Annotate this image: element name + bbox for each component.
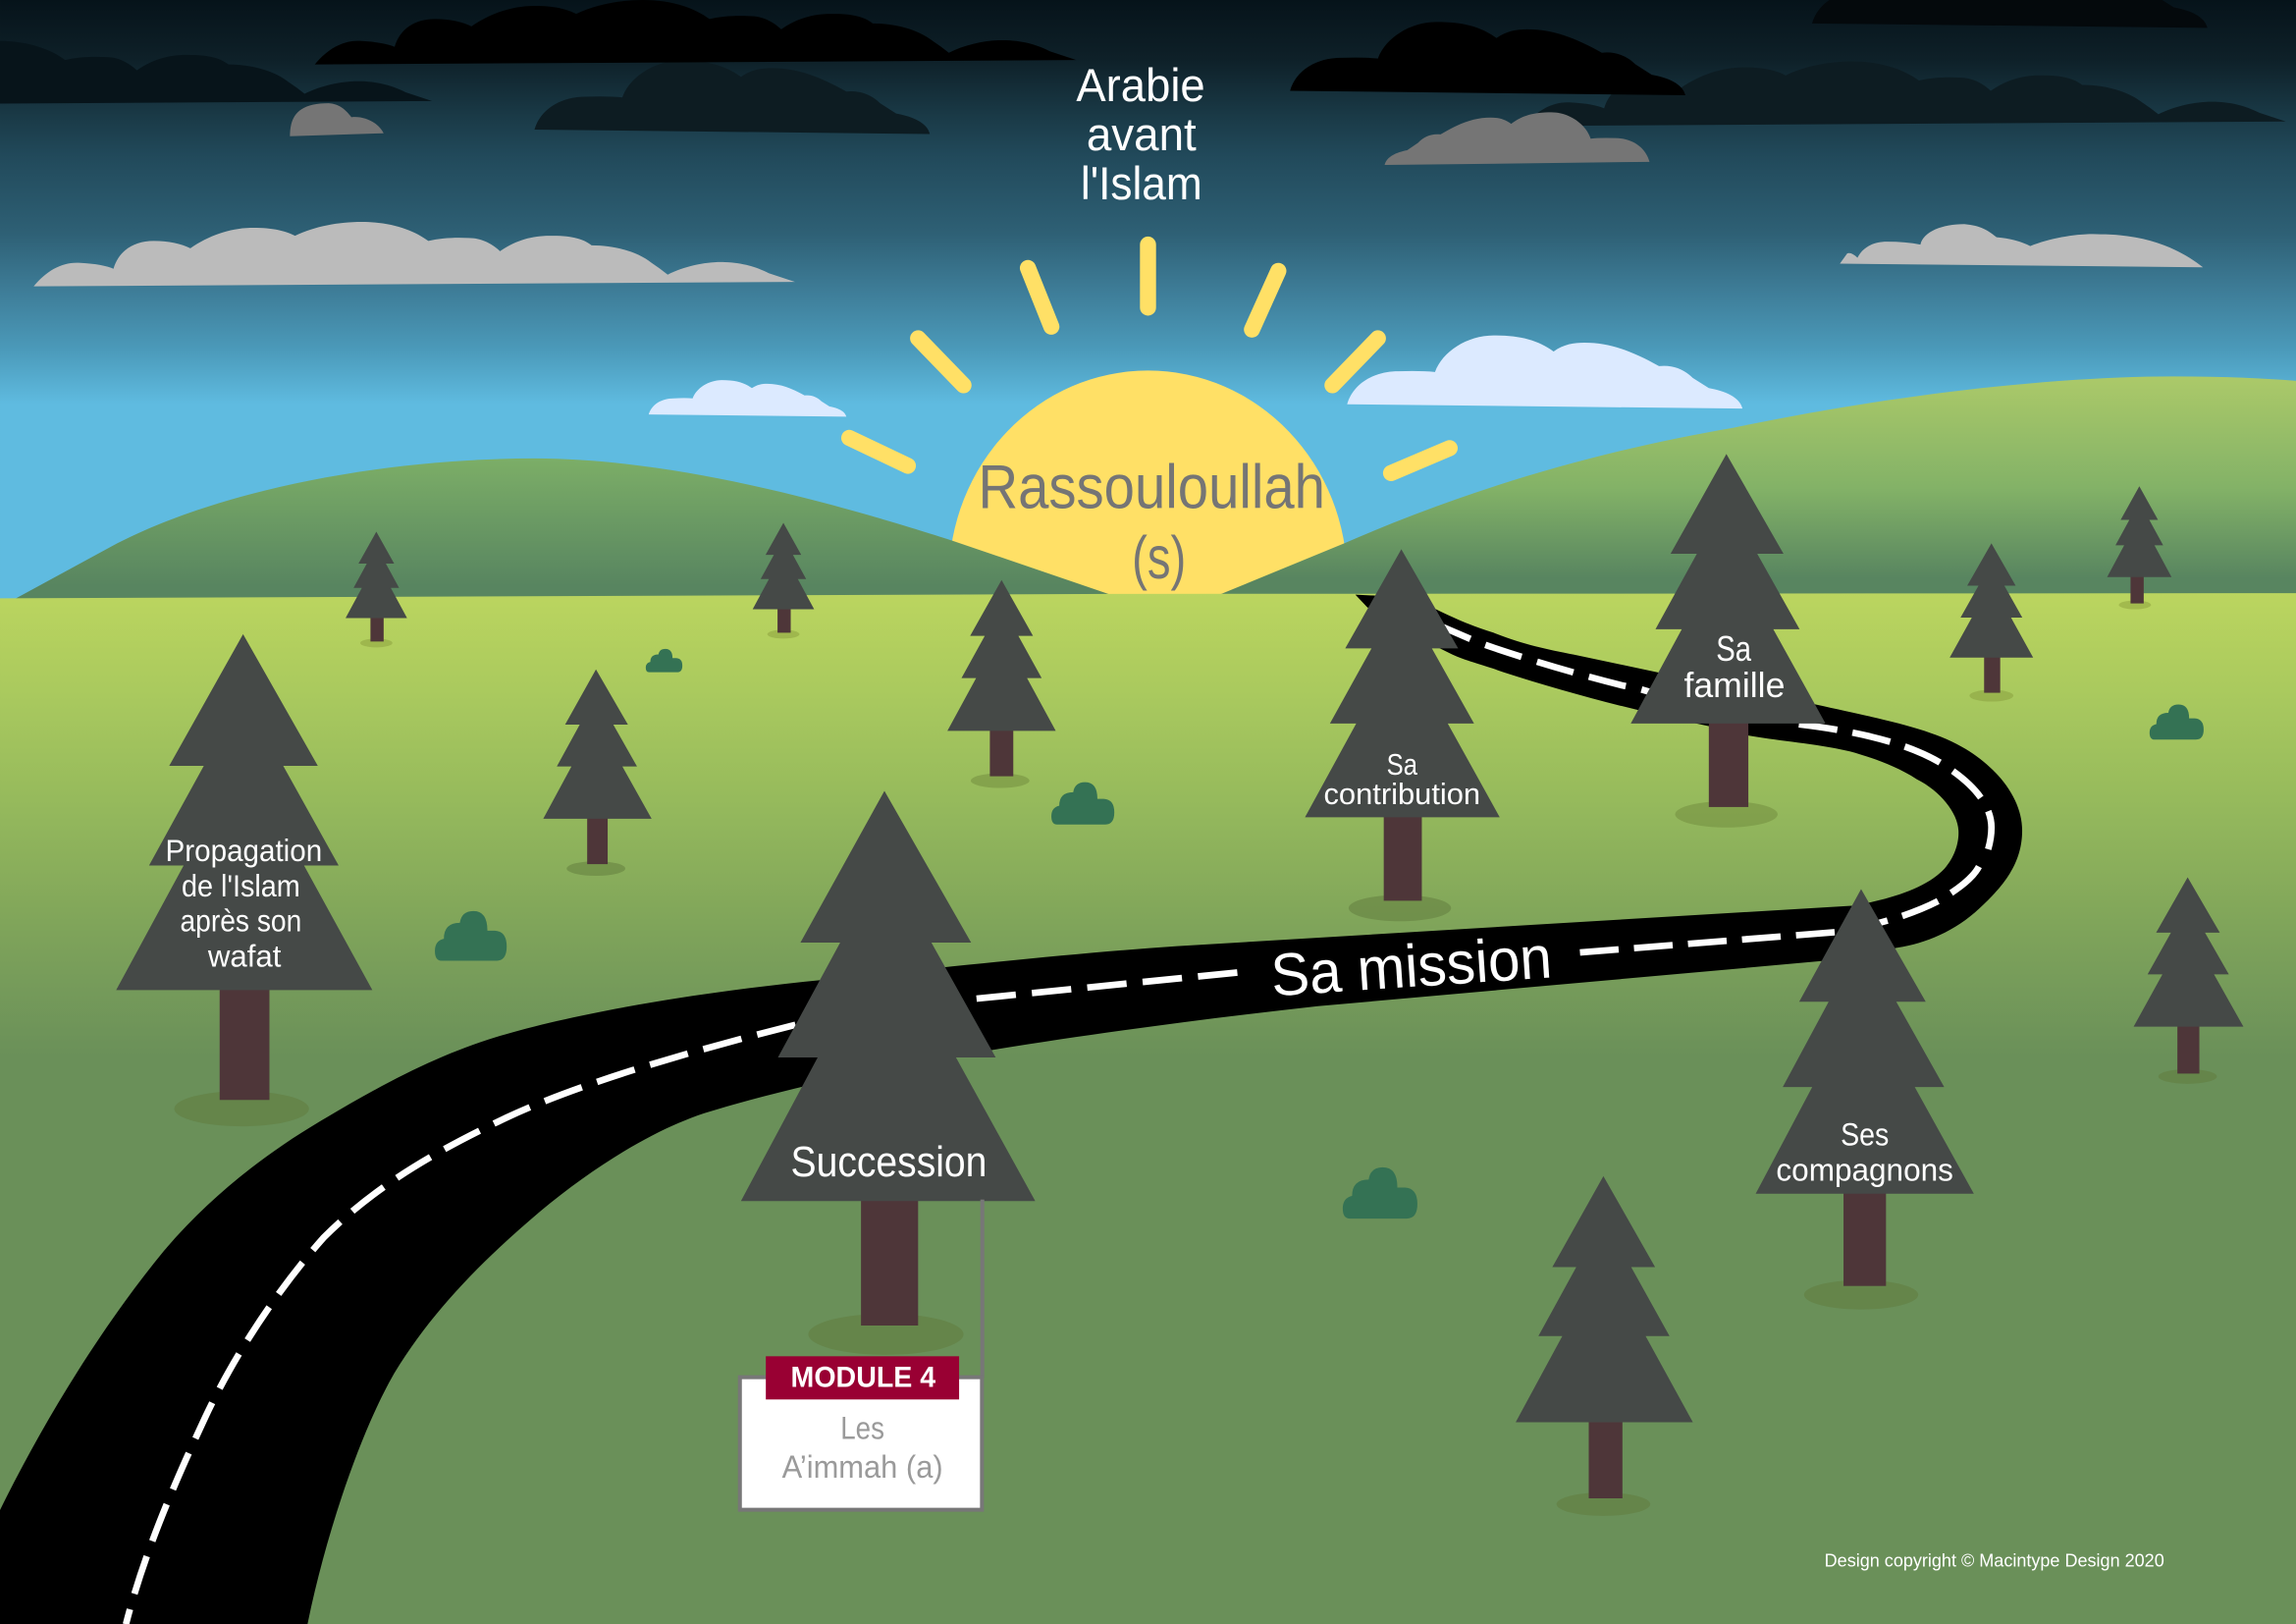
label: Propagation de l'Islam après son wafat: après son	[180, 904, 301, 939]
cloud: small grey left	[290, 103, 384, 136]
heading: Arabie avant l'Islam: Arabie	[1076, 60, 1205, 112]
bush 5	[2150, 705, 2204, 739]
tree: bottom right	[1515, 1176, 1693, 1516]
connector line	[981, 1200, 985, 1379]
label: Propagation de l'Islam après son wafat	[166, 834, 322, 974]
tree: far right small top	[2108, 486, 2171, 610]
cloud: centre-left dark	[534, 61, 930, 134]
callout: Module 4	[740, 1200, 985, 1510]
cloud: light grey right	[1840, 224, 2203, 267]
road centre dashes, upper bend	[1799, 725, 1992, 851]
sky background	[0, 0, 2296, 616]
road surface	[0, 595, 2022, 1624]
label: Succession: Succession	[791, 1139, 987, 1186]
module tag text: MODULE 4	[791, 1362, 936, 1394]
label: Propagation de l'Islam après son wafat: Propagation	[166, 834, 322, 868]
road label: Sa mission: Sa mission	[1269, 923, 1554, 1008]
title: Rassouloullah	[978, 454, 1325, 591]
cloud: light blue beside sun	[1347, 336, 1742, 408]
sun rays	[849, 244, 1450, 473]
cloud: top left dark	[0, 41, 432, 105]
tree: Sa contribution	[1304, 549, 1500, 921]
tree: Sa famille	[1629, 454, 1826, 828]
callout text	[782, 1410, 943, 1485]
callout text: Les	[840, 1410, 884, 1446]
sun disc	[949, 370, 1347, 786]
label: Propagation de l'Islam après son wafat: de l'Islam	[182, 869, 300, 903]
bush 1	[646, 649, 682, 673]
tree: small centre-left	[753, 523, 814, 638]
tree: Ses compagnons	[1752, 889, 1974, 1310]
label: Propagation de l'Islam après son wafat: wafat	[207, 940, 282, 974]
cloud: top right dark	[1812, 0, 2208, 27]
heading: Arabie avant l'Islam	[1076, 60, 1205, 210]
label: Sa contribution	[1324, 748, 1480, 811]
label: Sa famille	[1683, 629, 1785, 705]
label: Sa famille: famille	[1683, 666, 1785, 705]
sun	[849, 244, 1450, 786]
module tag	[766, 1356, 959, 1399]
tree: far left small	[346, 531, 407, 647]
label: Ses compagnons: Ses	[1841, 1116, 1889, 1153]
road centre dashes, lower bend	[1580, 861, 1981, 952]
copyright note: Design copyright © Macintype Design 2020	[1825, 1549, 2164, 1570]
cloud: right black	[1290, 22, 1685, 95]
callout box	[740, 1378, 982, 1510]
tree: Propagation	[115, 634, 372, 1126]
bush 2	[1051, 783, 1114, 825]
cloud: small light blue	[649, 380, 846, 416]
tree: far right medium	[2133, 878, 2243, 1084]
hill: right	[1205, 376, 2296, 601]
label: Ses compagnons	[1776, 1116, 1953, 1187]
cloud: light grey long	[33, 222, 795, 287]
cloud: grey right of title	[1385, 112, 1649, 165]
tree: medium centre	[947, 580, 1056, 788]
label: Sa famille: Sa	[1716, 629, 1751, 669]
road centre dashes, left part	[126, 972, 1237, 1624]
bush 3	[435, 911, 507, 960]
road centre dashes, far part	[1442, 626, 1678, 700]
tree: Succession	[737, 791, 1036, 1355]
bush 4	[1343, 1167, 1417, 1218]
bushes	[435, 649, 2204, 1218]
label: Ses compagnons: compagnons	[1776, 1151, 1953, 1187]
cloud: top black long	[315, 0, 1076, 65]
road	[0, 595, 2022, 1624]
heading: Arabie avant l'Islam: l'Islam	[1081, 158, 1202, 210]
tree: right small	[1949, 543, 2033, 702]
clouds	[0, 0, 2286, 416]
tree: medium left	[542, 670, 652, 876]
title: Rassouloullah: (s)	[1132, 524, 1186, 591]
cloud: right dark long	[1524, 62, 2286, 126]
heading: Arabie avant l'Islam: avant	[1087, 109, 1197, 161]
label: Sa contribution: Sa	[1387, 748, 1417, 782]
hill: left	[15, 459, 1128, 601]
ground	[0, 593, 2296, 1624]
title: Rassouloullah: Rassouloullah	[978, 454, 1325, 522]
callout text: A’immah (a)	[782, 1448, 943, 1485]
label: Sa contribution: contribution	[1324, 778, 1480, 811]
